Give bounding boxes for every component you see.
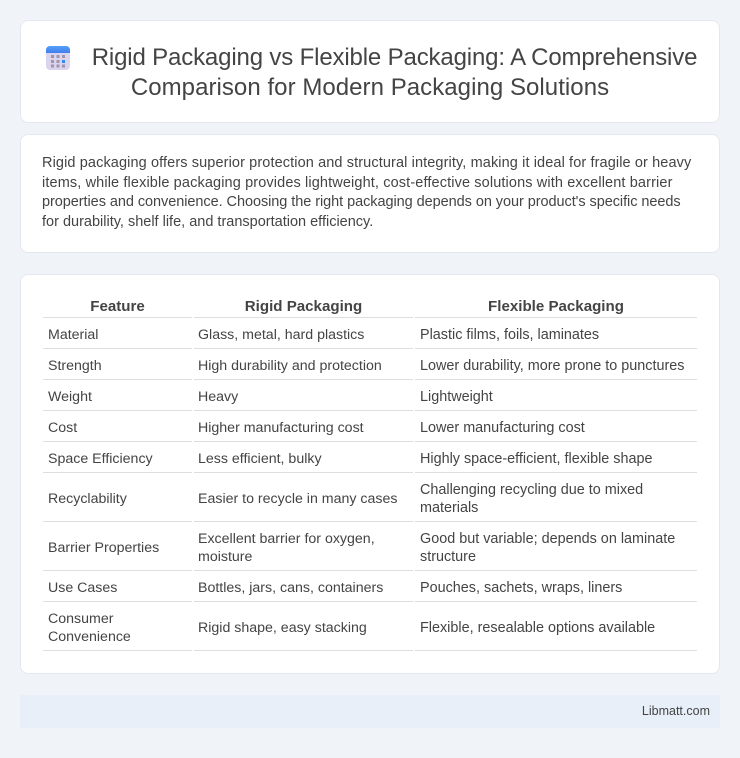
row: Consumer Convenience: Flexible, resealable options available: [420, 620, 655, 636]
row: Weight: Weight: [48, 389, 92, 405]
row: Barrier Properties: [48, 531, 675, 565]
row: Cost: Higher manufacturing cost: [198, 420, 364, 436]
row: Recyclability: [48, 482, 643, 516]
footer credit: Libmatt.com: [642, 704, 710, 718]
row: Consumer Convenience: Consumer: [48, 611, 113, 627]
row: Strength: Strength: [48, 358, 102, 374]
row: Barrier Properties: Good but variable; depends on laminate: [420, 531, 675, 547]
row: Weight: Lightweight: [420, 389, 493, 405]
row: Use Cases: Pouches, sachets, wraps, liners: [420, 580, 622, 596]
text block: introduction: [42, 155, 692, 230]
text block: introduction: Rigid packaging offers superior protection and structural integrity, making it ideal for fragile or heavy: [42, 155, 691, 171]
table header row: Rigid Packaging: [245, 298, 362, 315]
row: Space Efficiency: Highly space-efficient, flexible shape: [420, 451, 653, 467]
row: Strength: Lower durability, more prone to punctures: [420, 358, 684, 374]
row: Strength: [48, 358, 684, 374]
text block: introduction: for durability, shelf life, and transportation efficiency.: [42, 214, 373, 230]
row: Material: Plastic films, foils, laminates: [420, 327, 599, 343]
row: Barrier Properties: moisture: [198, 549, 252, 565]
row: Weight: Heavy: [198, 389, 238, 405]
row: Use Cases: Bottles, jars, cans, containers: [198, 580, 383, 596]
row: Consumer Convenience: Convenience: [48, 629, 131, 645]
row: Cost: [48, 420, 585, 436]
panel: header: [20, 20, 720, 123]
row: Recyclability: Easier to recycle in many cases: [198, 491, 398, 507]
row: Barrier Properties: Barrier Properties: [48, 540, 159, 556]
row: Recyclability: Challenging recycling due to mixed: [420, 482, 643, 498]
table header row: Flexible Packaging: [488, 298, 624, 315]
footer bar: [20, 695, 720, 728]
icon: calendar grid: [46, 46, 70, 70]
row: Strength: High durability and protection: [198, 358, 382, 374]
row: Consumer Convenience: Rigid shape, easy stacking: [198, 620, 367, 636]
row: Material: [48, 327, 599, 343]
table header row: Feature: [90, 298, 145, 315]
panel: comparison table: [20, 274, 720, 674]
row: Recyclability: Recyclability: [48, 491, 127, 507]
row: Cost: Lower manufacturing cost: [420, 420, 585, 436]
row: Space Efficiency: Space Efficiency: [48, 451, 153, 467]
row: Space Efficiency: Less efficient, bulky: [198, 451, 322, 467]
text block: introduction: items, while flexible packaging provides lightweight, cost-effective solutions with excellent barrier: [42, 175, 673, 191]
row: Weight: [48, 389, 493, 405]
row: Consumer Convenience: [48, 611, 655, 645]
row: Material: Glass, metal, hard plastics: [198, 327, 364, 343]
title: [92, 44, 697, 101]
panel: introduction text: [20, 134, 720, 253]
row: Barrier Properties: structure: [420, 549, 476, 565]
title: Rigid Packaging vs Flexible Packaging: A Comprehensive: [92, 44, 697, 71]
text block: introduction: properties and convenience. Choosing the right packaging depends on your product's specific needs: [42, 194, 681, 210]
row: Barrier Properties: Excellent barrier for oxygen,: [198, 531, 375, 547]
table header row: [90, 298, 624, 315]
row: Use Cases: [48, 580, 622, 596]
row: Recyclability: materials: [420, 500, 478, 516]
row: Material: Material: [48, 327, 98, 343]
row: Use Cases: Use Cases: [48, 580, 117, 596]
title: Comparison for Modern Packaging Solutions: [131, 74, 609, 101]
row: Space Efficiency: [48, 451, 653, 467]
row: Cost: Cost: [48, 420, 77, 436]
